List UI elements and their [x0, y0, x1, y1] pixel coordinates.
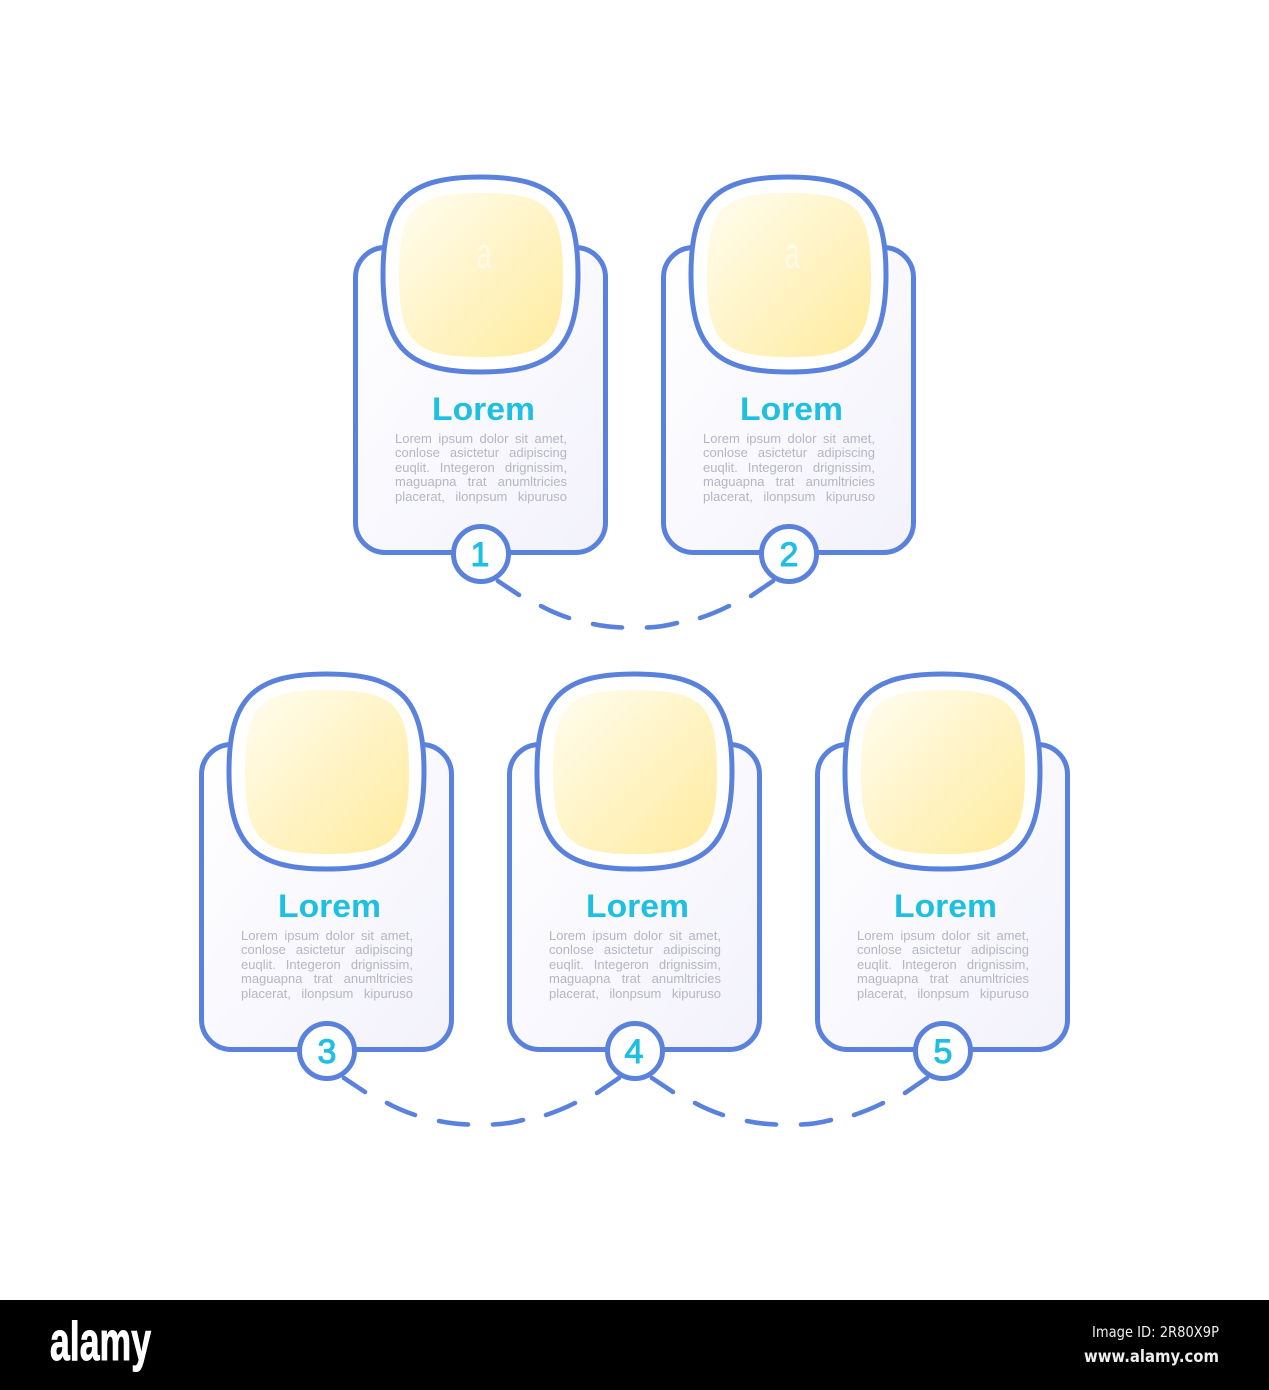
card 3 body text: maguapna trat anumltricies — [241, 971, 413, 986]
card 2 body text: conlose asictetur adipiscing — [703, 445, 875, 460]
card 3 body text: Lorem ipsum dolor sit amet, — [241, 928, 413, 943]
panel: card 2 — [661, 174, 916, 584]
card 5 body text: conlose asictetur adipiscing — [857, 942, 1029, 957]
card 2 body text: Lorem ipsum dolor sit amet, — [703, 431, 875, 446]
card 3 shapes, title and number badge: 3 — [318, 1033, 336, 1071]
card 3 shapes, title and number badge — [199, 672, 454, 1081]
card 1 body text: placerat, ilonpsum kipuruso — [395, 489, 567, 504]
card 2 body text: euqlit. Integeron drignissim, — [703, 460, 875, 475]
panel: card 4 — [507, 672, 762, 1081]
card 5 body text: euqlit. Integeron drignissim, — [857, 957, 1029, 972]
card 2 body text: placerat, ilonpsum kipuruso — [703, 489, 875, 504]
card 1 body text: maguapna trat anumltricies — [395, 474, 567, 489]
card 4 body text: maguapna trat anumltricies — [549, 971, 721, 986]
card 2 shapes, title and number badge — [661, 174, 916, 584]
card 4 body text: conlose asictetur adipiscing — [549, 942, 721, 957]
card 2 body text: maguapna trat anumltricies — [703, 474, 875, 489]
connector 4 to 5 — [652, 1078, 927, 1124]
card 5 body text — [857, 928, 1029, 1001]
card 5 shapes, title and number badge — [815, 672, 1070, 1081]
card 1 body text — [395, 431, 567, 504]
card 2 shapes, title and number badge: Lorem — [740, 391, 843, 427]
card 1 shapes, title and number badge: a — [476, 229, 492, 278]
card 3 body text — [241, 928, 413, 1001]
card 4 body text: placerat, ilonpsum kipuruso — [549, 986, 721, 1001]
connector 3 to 4 — [344, 1078, 619, 1124]
alamy logo: alamy — [50, 1310, 151, 1372]
card 4 shapes, title and number badge: Lorem — [586, 888, 689, 924]
footer watermark band — [0, 1300, 1269, 1390]
card 1 shapes, title and number badge — [353, 174, 608, 584]
card 5 shapes, title and number badge: 5 — [934, 1033, 952, 1071]
card 1 body text: Lorem ipsum dolor sit amet, — [395, 431, 567, 446]
card 1 shapes, title and number badge: 1 — [471, 536, 489, 574]
card 4 body text — [549, 928, 721, 1001]
card 3 shapes, title and number badge: Lorem — [278, 888, 381, 924]
card 2 body text — [703, 431, 875, 504]
website: www.alamy.com — [1084, 1347, 1219, 1367]
card 3 body text: placerat, ilonpsum kipuruso — [241, 986, 413, 1001]
panel: card 1 — [353, 174, 608, 584]
card 5 body text: Lorem ipsum dolor sit amet, — [857, 928, 1029, 943]
card 1 body text: conlose asictetur adipiscing — [395, 445, 567, 460]
card 1 body text: euqlit. Integeron drignissim, — [395, 460, 567, 475]
card 1 shapes, title and number badge: Lorem — [432, 391, 535, 427]
card 4 body text: Lorem ipsum dolor sit amet, — [549, 928, 721, 943]
image id: Image ID: 2R80X9P — [1092, 1323, 1219, 1341]
card 4 shapes, title and number badge — [507, 672, 762, 1081]
card 2 shapes, title and number badge: a — [784, 229, 800, 278]
card 4 body text: euqlit. Integeron drignissim, — [549, 957, 721, 972]
card 3 body text: conlose asictetur adipiscing — [241, 942, 413, 957]
panel: card 3 — [199, 672, 454, 1081]
card 5 body text: placerat, ilonpsum kipuruso — [857, 986, 1029, 1001]
card 5 shapes, title and number badge: Lorem — [894, 888, 997, 924]
panel: card 5 — [815, 672, 1070, 1081]
card 3 body text: euqlit. Integeron drignissim, — [241, 957, 413, 972]
card 2 shapes, title and number badge: 2 — [780, 536, 798, 574]
card 4 shapes, title and number badge: 4 — [625, 1033, 643, 1071]
card 5 body text: maguapna trat anumltricies — [857, 971, 1029, 986]
connector 1 to 2 — [498, 581, 773, 628]
